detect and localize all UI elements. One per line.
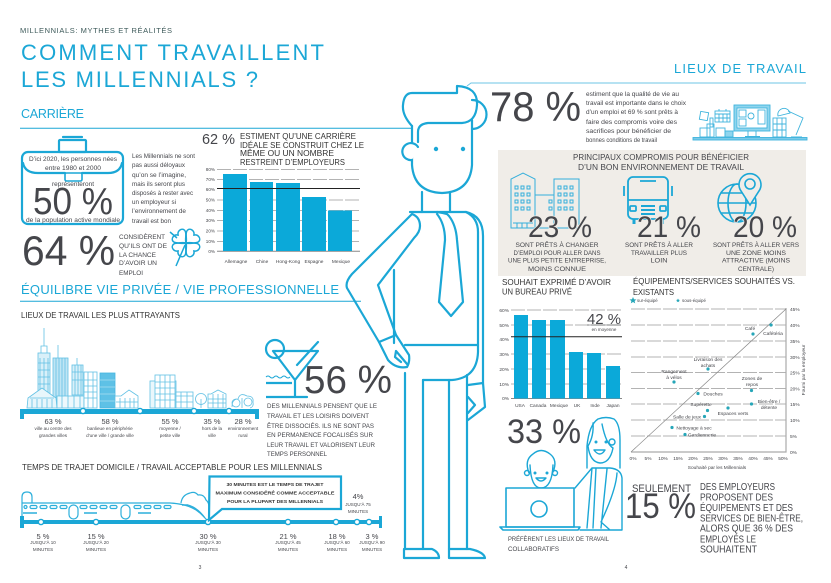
data point labels: Douches: [703, 392, 723, 398]
workplace percentages: 28 %: [234, 417, 252, 426]
stat: 33 %: 33 %: [507, 413, 581, 451]
scatter chart: equipment: 50%: [778, 456, 789, 462]
text block: 56 % description: LEUR TRAVAIL ET VALORISENT LEUR: [267, 442, 375, 449]
commute percentages: JUSQU’À 20: [83, 539, 109, 545]
text block: 56 % description: EN PERMANENCE FOCALISÉS SUR: [267, 430, 373, 439]
commute percentages: JUSQU’À 45: [275, 539, 301, 545]
commute percentages: 5 %: [37, 532, 50, 541]
bar chart: private office: Inde: [590, 403, 600, 409]
bar chart: career: [206, 167, 360, 265]
text block: 64 % description: EMPLOI: [119, 270, 143, 277]
icon: bus: [624, 177, 672, 224]
commute percentages: MINUTES: [327, 547, 347, 552]
scatter chart: equipment: 30%: [718, 456, 729, 462]
bar chart: private office: Mexique: [550, 403, 568, 409]
text block: 64 % description: QU’ILS ONT DE: [119, 243, 168, 250]
bar chart: career: Chine: [256, 259, 269, 265]
briefcase text: de la population active mondiale: [26, 217, 121, 224]
text block: 56 % description: [267, 403, 377, 458]
text block: 78 % description: [586, 91, 687, 144]
data point labels: détente: [761, 405, 777, 411]
icon: briefcase: [22, 137, 123, 224]
text block: loyalty: un employeur si: [132, 199, 176, 206]
scatter chart: equipment: 20%: [688, 456, 699, 462]
commute percentages: 21 %: [279, 532, 297, 541]
bar chart: career: 0%: [208, 249, 215, 254]
text block: 78 % description: sacrifices pour bénéficier de: [586, 128, 672, 135]
bar chart: career: 70%: [206, 177, 215, 182]
text block: 62 % description: MÊME OU UN NOMBRE: [240, 149, 334, 158]
scatter chart: equipment: 35%: [790, 339, 800, 345]
data point labels: Zones de: [742, 376, 762, 382]
torso and tie: [394, 212, 483, 383]
scatter chart: equipment: 0%: [630, 456, 637, 462]
briefcase text: 50 %: [33, 181, 113, 223]
text block: 15 % description: SOUHAITENT: [700, 545, 757, 556]
section rule: équilibre: [20, 300, 361, 302]
data point labels: repos: [746, 382, 759, 388]
text block: 33 % description: COLLABORATIFS: [508, 546, 559, 553]
compromis labels: MOINS CONNUE: [528, 266, 587, 273]
bar chart: private office: Canada: [530, 403, 547, 409]
commute percentages: [30, 492, 385, 552]
workplace percentages: ville: [208, 433, 216, 438]
workplace percentages: environnement: [228, 426, 259, 431]
commute percentages: JUSQU’À 10: [30, 539, 56, 545]
heading: équipements: EXISTANTS: [633, 288, 674, 297]
commute percentages: 15 %: [87, 532, 105, 541]
callout: 30 minutes: [209, 476, 341, 520]
stat: seulement 15 %: SEULEMENT: [632, 483, 691, 495]
bar chart: career: Allemagne: [225, 259, 248, 265]
man: [524, 450, 558, 488]
bar chart: career: 40%: [206, 208, 215, 213]
text block: 15 % description: [700, 482, 803, 556]
bar chart: private office: 60%: [499, 308, 510, 314]
legend: [630, 297, 706, 303]
page number 4: 4: [625, 565, 628, 571]
text block: 62 % description: ESTIMENT QU’UNE CARRIÈRE: [240, 132, 356, 141]
panel heading: PRINCIPAUX COMPROMIS POUR BÉNÉFICIER: [573, 153, 749, 162]
text block: 78 % description: faire des compromis voire des: [586, 119, 677, 126]
workplace percentages: 63 %: [44, 417, 62, 426]
commute percentages: 4%: [353, 492, 364, 501]
text block: 62 % description: [240, 132, 364, 167]
commute percentages: 30 %: [199, 532, 217, 541]
icon: globe and pin: [718, 174, 761, 222]
workplace percentages: d’une ville / grande ville: [86, 433, 134, 438]
panel: compromis: [498, 150, 806, 276]
scatter chart: equipment: 45%: [763, 456, 774, 462]
scatter chart: equipment: 15%: [673, 456, 684, 462]
commute percentages: MINUTES: [362, 547, 382, 552]
bar chart: private office: 50%: [499, 323, 510, 329]
icon: buildings: [511, 173, 579, 228]
stats row: 23 %: [528, 211, 592, 244]
scatter chart: equipment: 20%: [790, 386, 800, 392]
bar chart: career: Espagne: [305, 259, 324, 265]
data point labels: à vélos: [666, 375, 682, 381]
bar chart: private office: UK: [574, 403, 581, 409]
text block: 64 % description: LA CHANCE: [119, 252, 157, 259]
commute percentages: JUSQU’À 30: [195, 539, 221, 545]
scatter chart: equipment: 45%: [790, 307, 800, 313]
bar chart: career: 10%: [206, 239, 215, 244]
data point labels: Livraison des: [694, 357, 723, 363]
text block: loyalty: mais ils seront plus: [132, 181, 185, 188]
stats row: 20 %: [733, 211, 797, 244]
compromis labels: D’EMPLOI POUR ALLER DANS: [514, 250, 601, 257]
text block: 15 % description: SERVICES DE BIEN-ÊTRE,: [700, 514, 803, 525]
text block: 56 % description: TEMPS PERSONNEL: [267, 451, 327, 458]
data point labels: Espaces verts: [718, 411, 749, 417]
scatter chart: equipment: 40%: [790, 323, 800, 329]
data points: [670, 323, 773, 436]
scatter chart: equipment: [630, 297, 807, 471]
workplace percentages: 58 %: [101, 417, 119, 426]
heading: temps de trajet: TEMPS DE TRAJET DOMICILE / TRAVAIL ACCEPTABLE POUR LES MILLENNIALS: [22, 463, 322, 472]
scatter chart: equipment: 25%: [790, 370, 800, 376]
text block: 62 % description: IDÉALE SE CONSTRUIT CHEZ LE: [240, 141, 364, 150]
scatter chart: equipment: 10%: [790, 418, 800, 424]
scatter chart: equipment: 5%: [645, 456, 652, 462]
briefcase text: représenteront: [52, 181, 94, 188]
bar chart: career: 50%: [206, 198, 215, 202]
section rule: lieux de travail: [467, 83, 806, 86]
heading: lieux de travail: LIEUX DE TRAVAIL: [674, 61, 806, 76]
data point labels: Bien-être /: [758, 399, 781, 405]
workplace percentages: ville au centre des: [34, 426, 72, 431]
text block: loyalty: l’environnement de: [132, 208, 187, 215]
text block: 78 % description: bonnes conditions de travail: [586, 137, 657, 144]
text block: 64 % description: D’AVOIR UN: [119, 260, 157, 267]
compromis labels: [508, 240, 800, 273]
panel: briefcase 50 %: [22, 137, 123, 224]
icon: desk and computer: [693, 105, 807, 140]
scatter chart: equipment: 25%: [703, 456, 714, 462]
text block: loyalty: travail est bon: [132, 218, 172, 225]
bar chart: private office: 20%: [499, 367, 510, 373]
bar chart: private office: 0%: [502, 396, 510, 402]
stat: seulement 15 %: 15 %: [625, 487, 696, 526]
text block: loyalty: qu’on se l’imagine,: [132, 172, 186, 179]
title: COMMENT TRAVAILLENT: [21, 40, 324, 65]
workplace percentages: moyenne /: [159, 426, 181, 431]
workplace percentages: 55 %: [161, 417, 179, 426]
workplace percentages: 35 %: [203, 417, 221, 426]
scatter chart: equipment: 10%: [658, 456, 669, 462]
stat: 56 %: 56 %: [304, 359, 392, 402]
text block: 62 % description: RESTREINT D’EMPLOYEURS: [240, 158, 345, 167]
illustration: city skyline: [20, 328, 259, 419]
heading: bureau privé: UN BUREAU PRIVÉ: [502, 286, 572, 296]
text block: 15 % description: PROPOSENT DES: [700, 493, 773, 504]
text block: 15 % description: ALORS QUE 36 % DES: [700, 524, 793, 535]
legend: sur-équipé: [637, 298, 658, 303]
stat: 78 %: 78 %: [490, 83, 581, 130]
bar chart: private office: USA: [515, 403, 526, 409]
header label: MILLENNIALS: MYTHES ET RÉALITÉS: [20, 26, 172, 35]
compromis labels: ATTRACTIVE (MOINS: [722, 258, 791, 264]
compromis labels: CENTRALE): [738, 266, 774, 273]
bar chart: career: 80%: [206, 167, 215, 172]
text block: loyalty: disposés à rester avec: [132, 190, 193, 197]
compromis labels: SONT PRÊTS À ALLER VERS: [713, 240, 800, 249]
panel heading: D’UN BON ENVIRONNEMENT DE TRAVAIL: [578, 163, 745, 172]
commute percentages: JUSQU’À 75: [345, 501, 371, 507]
legend: sous-équipé: [682, 298, 706, 303]
data point labels: Supérette: [690, 402, 712, 408]
stat: 62 %: 62 %: [202, 131, 235, 148]
compromis labels: LOIN: [650, 258, 668, 264]
icon: cocktail: [266, 340, 318, 397]
section rule: carrière: [20, 127, 412, 129]
text block: 33 % description: [508, 534, 609, 553]
data point labels: Salle de jeux: [673, 414, 702, 420]
data point labels: Café: [745, 326, 755, 332]
illustration: businessman: [347, 86, 486, 558]
title: [21, 40, 324, 92]
scatter chart: equipment: Fourni par la employeur: [801, 344, 807, 395]
panel heading: [573, 153, 749, 172]
text block: 64 % description: [119, 232, 168, 277]
callout: 30 minutes: MAXIMUM CONSIDÉRÉ COMME ACCEPTABLE: [216, 488, 335, 496]
bar chart: career: Hong-Kong: [276, 259, 300, 265]
legs and shoes: [404, 373, 485, 558]
commute percentages: MINUTES: [348, 509, 368, 514]
page number 3: 3: [199, 565, 202, 571]
bar chart: private office: 40%: [499, 337, 510, 343]
text block: 56 % description: TRAVAIL ET LES LOISIRS DOIVENT: [267, 413, 369, 420]
text block: 78 % description: estiment que la qualité de vie au: [586, 91, 680, 98]
workplace percentages: banlieue en périphérie: [87, 426, 133, 431]
commute percentages: 3 %: [366, 532, 379, 541]
text block: 15 % description: EMPLOYÉS LE: [700, 535, 756, 546]
heading: équipements: ÉQUIPEMENTS/SERVICES SOUHAITÉS VS.: [633, 276, 795, 286]
data point labels: Cafétéria: [763, 331, 783, 337]
bar chart: private office: 30%: [499, 352, 510, 358]
workplace percentages: rural: [238, 433, 248, 438]
text block: loyalty: Les Millennials ne sont: [132, 153, 195, 160]
heading: équilibre: ÉQUILIBRE VIE PRIVÉE / VIE PROFESSIONNELLE: [21, 282, 339, 297]
text block: 56 % description: DES MILLENNIALS PENSENT QUE LE: [267, 403, 377, 410]
callout: 30 minutes: 30 MINUTES EST LE TEMPS DE TRAJET: [226, 482, 324, 488]
data point labels: Rangement: [661, 369, 687, 375]
text block: 15 % description: DES EMPLOYEURS: [700, 482, 775, 493]
commute percentages: JUSQU’À 90: [359, 539, 385, 545]
bar chart: private office: 10%: [499, 382, 510, 388]
scatter chart: equipment: 5%: [790, 434, 798, 440]
scatter chart: equipment: 0%: [790, 450, 798, 456]
text block: 15 % description: ÉQUIPEMENTS ET DES: [700, 503, 793, 514]
data point labels: Gardiennerie: [688, 432, 716, 438]
briefcase text: entre 1980 et 2000: [45, 165, 102, 172]
compromis labels: UNE ZONE MOINS: [726, 250, 787, 257]
illustration: train: [22, 492, 209, 520]
text block: 56 % description: ÊTRE DISSOCIÉS. ILS NE SONT PAS: [267, 421, 374, 430]
scatter chart: equipment: Souhaité par les Millennials: [688, 465, 747, 471]
illustration: colleagues with laptop: [500, 418, 622, 530]
workplace percentages: grandes villes: [39, 433, 68, 438]
timeline bar: workplaces: [20, 408, 259, 419]
callout: 42 % average: 42 %: [587, 311, 621, 328]
callout: 42 % average: en moyenne: [592, 327, 617, 332]
data point labels: [661, 326, 783, 438]
callout: 30 minutes: POUR LA PLUPART DES MILLENNIALS: [227, 499, 324, 505]
heading: carrière: CARRIÈRE: [21, 106, 84, 121]
text block: 64 % description: CONSIDÈRENT: [119, 232, 165, 241]
scatter chart: equipment: 15%: [790, 402, 800, 408]
scatter chart: equipment: 35%: [733, 456, 744, 462]
data point labels: Nettoyage à sec: [676, 426, 712, 432]
compromis labels: UNE PLUS PETITE ENTREPRISE,: [508, 258, 606, 264]
head: [402, 86, 486, 212]
bar chart: career: 20%: [206, 228, 215, 234]
data point labels: achats: [701, 363, 716, 369]
text block: 78 % description: travail est importante dans le choix: [586, 100, 687, 107]
commute percentages: JUSQU’À 60: [324, 539, 350, 545]
bar chart: career: 30%: [206, 218, 215, 223]
commute percentages: MINUTES: [33, 547, 53, 552]
text block: loyalty: [132, 153, 195, 225]
commute percentages: MINUTES: [278, 547, 298, 552]
text block: loyalty: pas aussi déloyaux: [132, 162, 186, 169]
scatter chart: equipment: 30%: [790, 355, 800, 361]
text block: 33 % description: PRÉFÈRENT LES LIEUX DE TRAVAIL: [508, 534, 609, 543]
briefcase text: [26, 156, 121, 224]
workplace percentages: hors de la: [202, 426, 223, 431]
compromis labels: SONT PRÊTS À ALLER: [625, 240, 693, 249]
workplace percentages: [34, 417, 259, 438]
compromis labels: SONT PRÊTS À CHANGER: [516, 240, 599, 249]
stats row: 21 %: [637, 211, 701, 244]
bar chart: private office: [499, 308, 622, 409]
laptop: [500, 488, 580, 530]
stat: 64 %: 64 %: [22, 227, 115, 274]
heading: lieux attrayants: LIEUX DE TRAVAIL LES PLUS ATTRAYANTS: [21, 311, 180, 320]
bar chart: career: Mexique: [332, 259, 350, 265]
heading: bureau privé: SOUHAIT EXPRIMÉ D’AVOIR: [502, 277, 611, 287]
title: LES MILLENNIALS ?: [21, 67, 258, 92]
compromis labels: TRAVAILLER PLUS: [631, 250, 688, 257]
woman: [575, 418, 622, 530]
scatter chart: equipment: 40%: [748, 456, 759, 462]
commute percentages: MINUTES: [86, 547, 106, 552]
heading: bureau privé: [502, 277, 611, 296]
heading: équipements: [633, 276, 795, 297]
icon: four-leaf clover: [170, 228, 201, 266]
left arm: [347, 214, 420, 367]
workplace percentages: petite ville: [160, 433, 181, 438]
commute percentages: MINUTES: [198, 547, 218, 552]
briefcase text: D’ici 2020, les personnes nées: [29, 156, 117, 163]
text block: 78 % description: d’un emploi et 69 % sont prêts à: [586, 109, 679, 116]
commute percentages: 18 %: [328, 532, 346, 541]
timeline bar: commute: [20, 516, 382, 528]
stats row: [528, 211, 797, 244]
bar chart: private office: Japan: [606, 403, 620, 409]
bar chart: career: 60%: [206, 187, 215, 192]
